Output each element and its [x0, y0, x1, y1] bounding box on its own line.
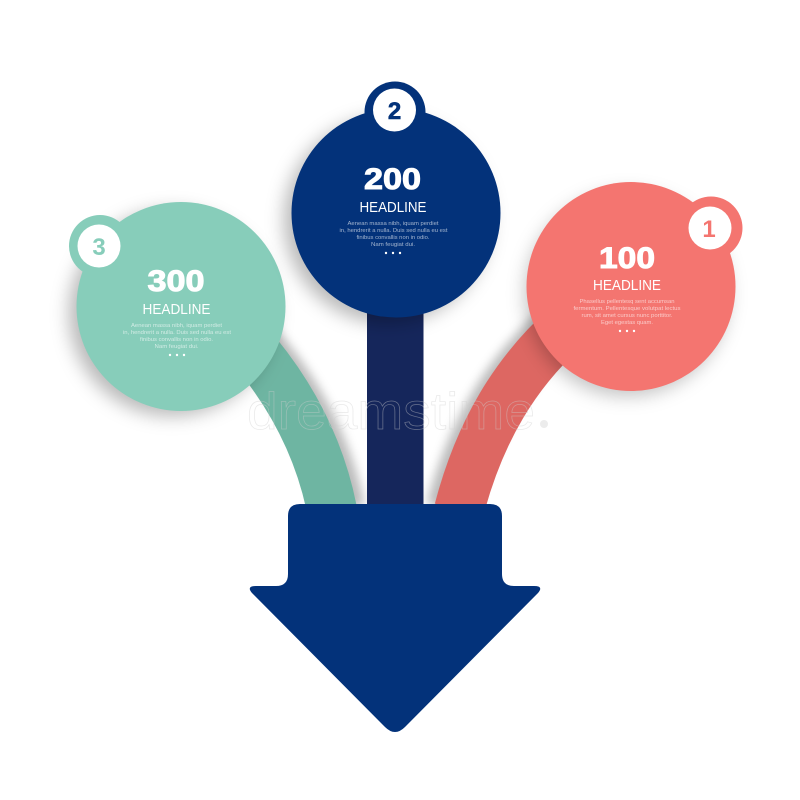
watermark: dreamstime [247, 383, 535, 441]
badge 3 [78, 224, 120, 268]
text block 100: rum, sit amet cursus nunc porttitor. [582, 313, 673, 319]
text block 200: 200 [364, 163, 421, 196]
panel: circle 2 navy [284, 82, 500, 323]
text block 100: Eget egestas quam. [601, 320, 653, 326]
text block 200: Aenean massa nibh, iquam perdiet [348, 221, 439, 227]
text block 300: Aenean massa nibh, iquam perdiet [131, 323, 222, 329]
badge 3: 3 [92, 234, 106, 261]
panel: circle 1 red [525, 182, 742, 396]
text block 100: HEADLINE [593, 278, 661, 294]
text block 300: Nam feugiat dui. [154, 344, 199, 350]
badge 1: 1 [702, 216, 716, 243]
text block 300 [123, 265, 231, 356]
text block 200 [340, 163, 448, 254]
text block 200: HEADLINE [360, 200, 427, 216]
panel: red connector band [450, 327, 566, 510]
text block 100: Phasellus pellentesq sent accumsan [580, 299, 674, 305]
text block 100: 100 [599, 242, 655, 275]
text block 100: fermentum. Pellentesque volutpat lectus [574, 306, 681, 312]
text block 300: HEADLINE [142, 302, 211, 318]
text block 100 [574, 242, 681, 332]
text block 200: finibus convallis non in odio. [356, 235, 430, 241]
text block 300: finibus convallis non in odio. [140, 337, 213, 343]
badge 2: 2 [388, 98, 401, 125]
panel: green connector band [245, 340, 341, 510]
panel: circle 3 green [69, 202, 286, 416]
text block 200: in, hendrerit a nulla. Duis sed nulla eu est [340, 228, 448, 234]
text block 200: Nam feugiat dui. [371, 242, 415, 248]
badge 2 [373, 88, 416, 132]
text block 300: in, hendrerit a nulla. Duis sed nulla eu est [123, 330, 231, 336]
panel: navy center bar [367, 300, 424, 510]
badge 1 [688, 206, 732, 250]
panel: down arrow [250, 504, 540, 732]
text block 300: 300 [148, 265, 204, 298]
